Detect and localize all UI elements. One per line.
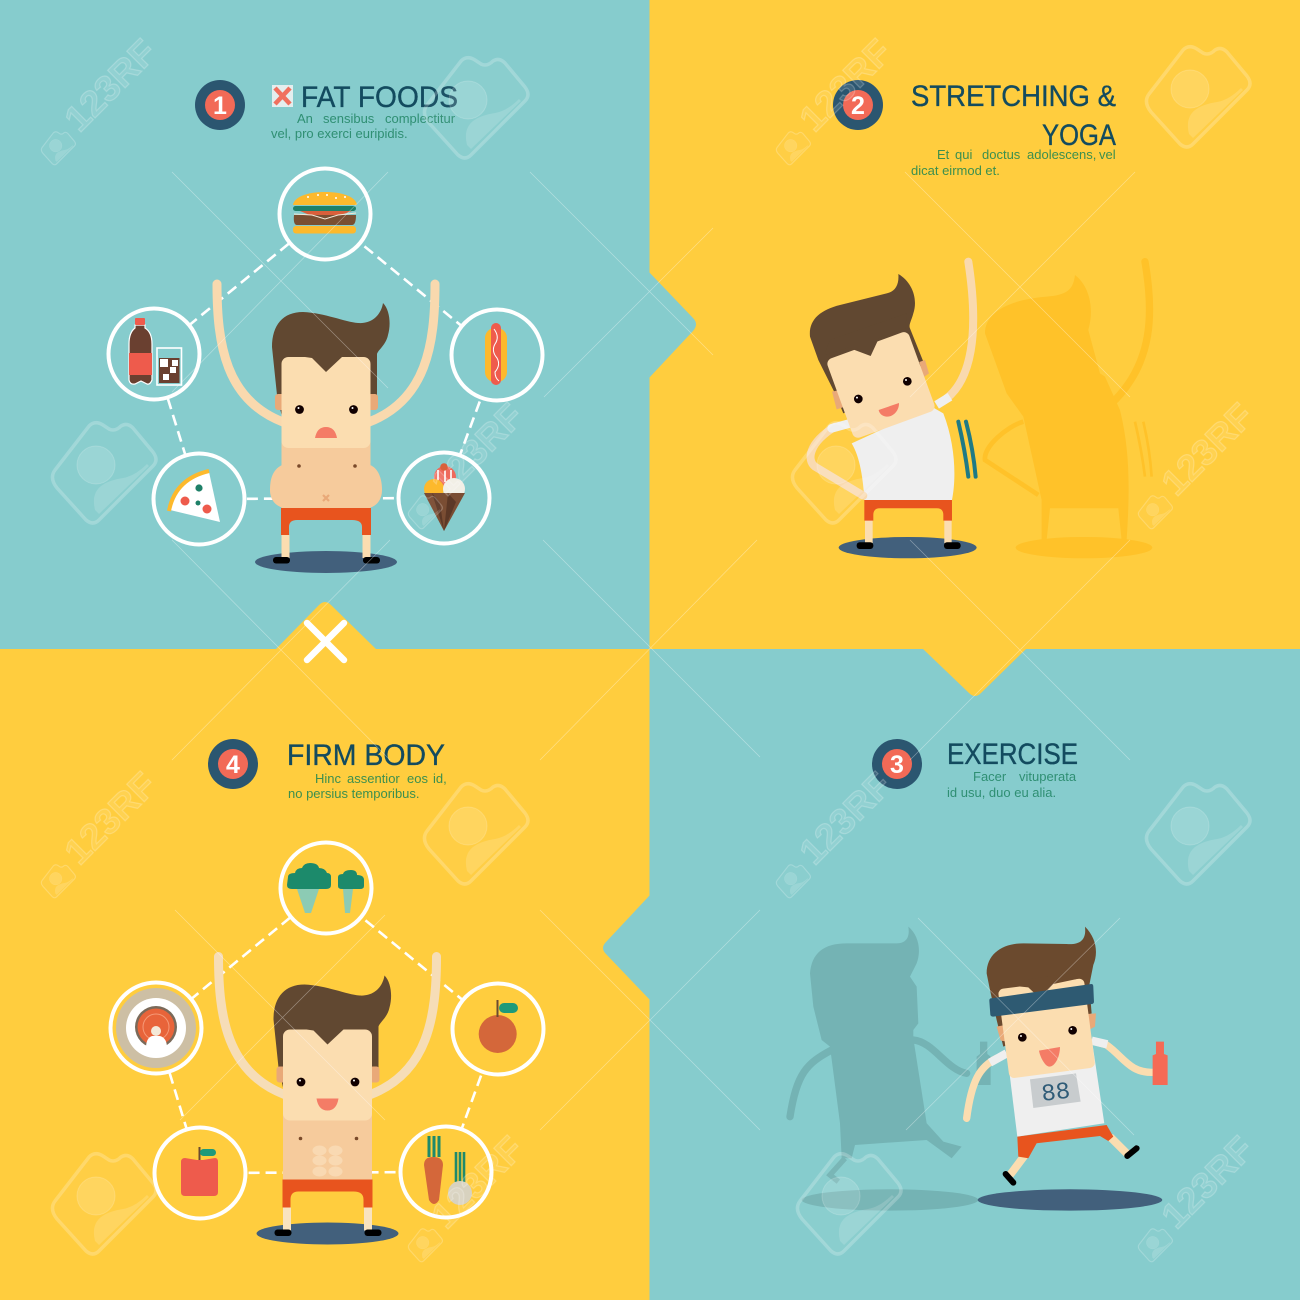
icon: burger — [280, 168, 370, 260]
heading: exercise: EXERCISE — [947, 738, 1078, 771]
badge: number 3 — [872, 739, 922, 789]
badge: number 1 — [195, 80, 245, 130]
panel: fat foods — [108, 80, 542, 573]
panel: stretching and yoga — [810, 80, 1152, 558]
icon: white cross on arrow — [307, 623, 344, 660]
text block: exercise description: vituperata — [1019, 769, 1077, 784]
watermarks: 123RF stock logos: 123RF — [1153, 1128, 1261, 1236]
watermarks: 123RF stock logos: 123RF — [1153, 395, 1261, 503]
text block: firm body description: Hinc — [315, 771, 342, 786]
badge: number 3: 3 — [890, 751, 904, 779]
panel: firm body — [110, 739, 544, 1244]
panel: exercise — [790, 738, 1168, 1211]
text block: stretching description: doctus — [982, 147, 1021, 162]
character: shadow figure running — [790, 927, 991, 1211]
text block: firm body description: id, — [433, 771, 447, 786]
text block: stretching description: adolescens, — [1027, 147, 1096, 162]
text block: exercise description: id usu, duo eu alia. — [947, 785, 1056, 800]
icon: pizza slice — [154, 454, 244, 544]
character: man stretching — [810, 262, 977, 558]
text block: stretching description: Et — [937, 147, 950, 162]
character: fit man — [218, 956, 436, 1244]
icon: orange — [452, 984, 544, 1074]
icon: hot dog — [452, 310, 542, 400]
badge: number 4 — [208, 739, 258, 789]
dashed pentagon connectors — [156, 888, 498, 1173]
dashed pentagon connectors — [154, 214, 497, 499]
text block: stretching description: vel — [1099, 147, 1116, 162]
text block: stretching description: qui — [955, 147, 972, 162]
text block: fat foods description: vel, pro exerci euripidis. — [271, 126, 408, 141]
badge: number 4: 4 — [226, 751, 240, 779]
heading: stretching and yoga: YOGA — [1042, 119, 1116, 152]
text block: firm body description: assentior — [347, 771, 400, 786]
icon: crossed box — [272, 85, 293, 107]
text block: firm body description: no persius temporibus. — [288, 786, 420, 801]
text block: stretching description: dicat eirmod et. — [911, 163, 1000, 178]
watermarks: 123RF stock logos: 123RF — [791, 31, 899, 139]
icon: broccoli — [280, 842, 372, 934]
character: man running — [967, 927, 1168, 1211]
text block: fat foods description: complectitur — [385, 111, 456, 126]
badge: number 1: 1 — [213, 92, 227, 120]
watermarks: 123RF stock logos: 123RF — [56, 31, 164, 139]
icon: apple — [154, 1128, 246, 1218]
text block: firm body description: eos — [407, 771, 428, 786]
arrow: panel 1 to panel 2 — [649, 272, 696, 378]
heading: stretching and yoga: STRETCHING & — [911, 80, 1116, 113]
heading: fat foods: FAT FOODS — [301, 81, 458, 114]
watermarks: 123RF stock logos: 123RF — [791, 764, 899, 872]
character: shadow figure stretching — [985, 262, 1152, 558]
badge: number 2 — [833, 80, 883, 130]
arrow: panel 4 back to panel 1 — [275, 602, 377, 650]
text block: fat foods description: An — [297, 111, 313, 126]
character: man running: 88 — [1040, 1079, 1072, 1109]
text block: fat foods description: sensibus — [323, 111, 375, 126]
watermarks: 123RF stock logos: 123RF — [423, 395, 531, 503]
icon: cola bottle and glass — [108, 308, 200, 400]
heading: firm body: FIRM BODY — [287, 739, 445, 772]
icon: ice cream cone — [398, 452, 490, 544]
arrow: panel 2 to panel 3 — [922, 648, 1027, 696]
icon: salmon plate — [110, 982, 202, 1074]
icon: carrot and turnip — [400, 1126, 492, 1218]
arrow: panel 3 to panel 4 — [603, 895, 650, 1000]
watermarks: 123RF stock logos: 123RF — [423, 1128, 531, 1236]
panel background: firm body yellow — [0, 649, 650, 1300]
badge: number 2: 2 — [851, 92, 865, 120]
character: overweight man — [217, 284, 435, 573]
watermarks: 123RF stock logos: 123RF — [56, 764, 164, 872]
text block: exercise description: Facer — [973, 769, 1007, 784]
panel background: stretching yellow — [650, 0, 1300, 649]
